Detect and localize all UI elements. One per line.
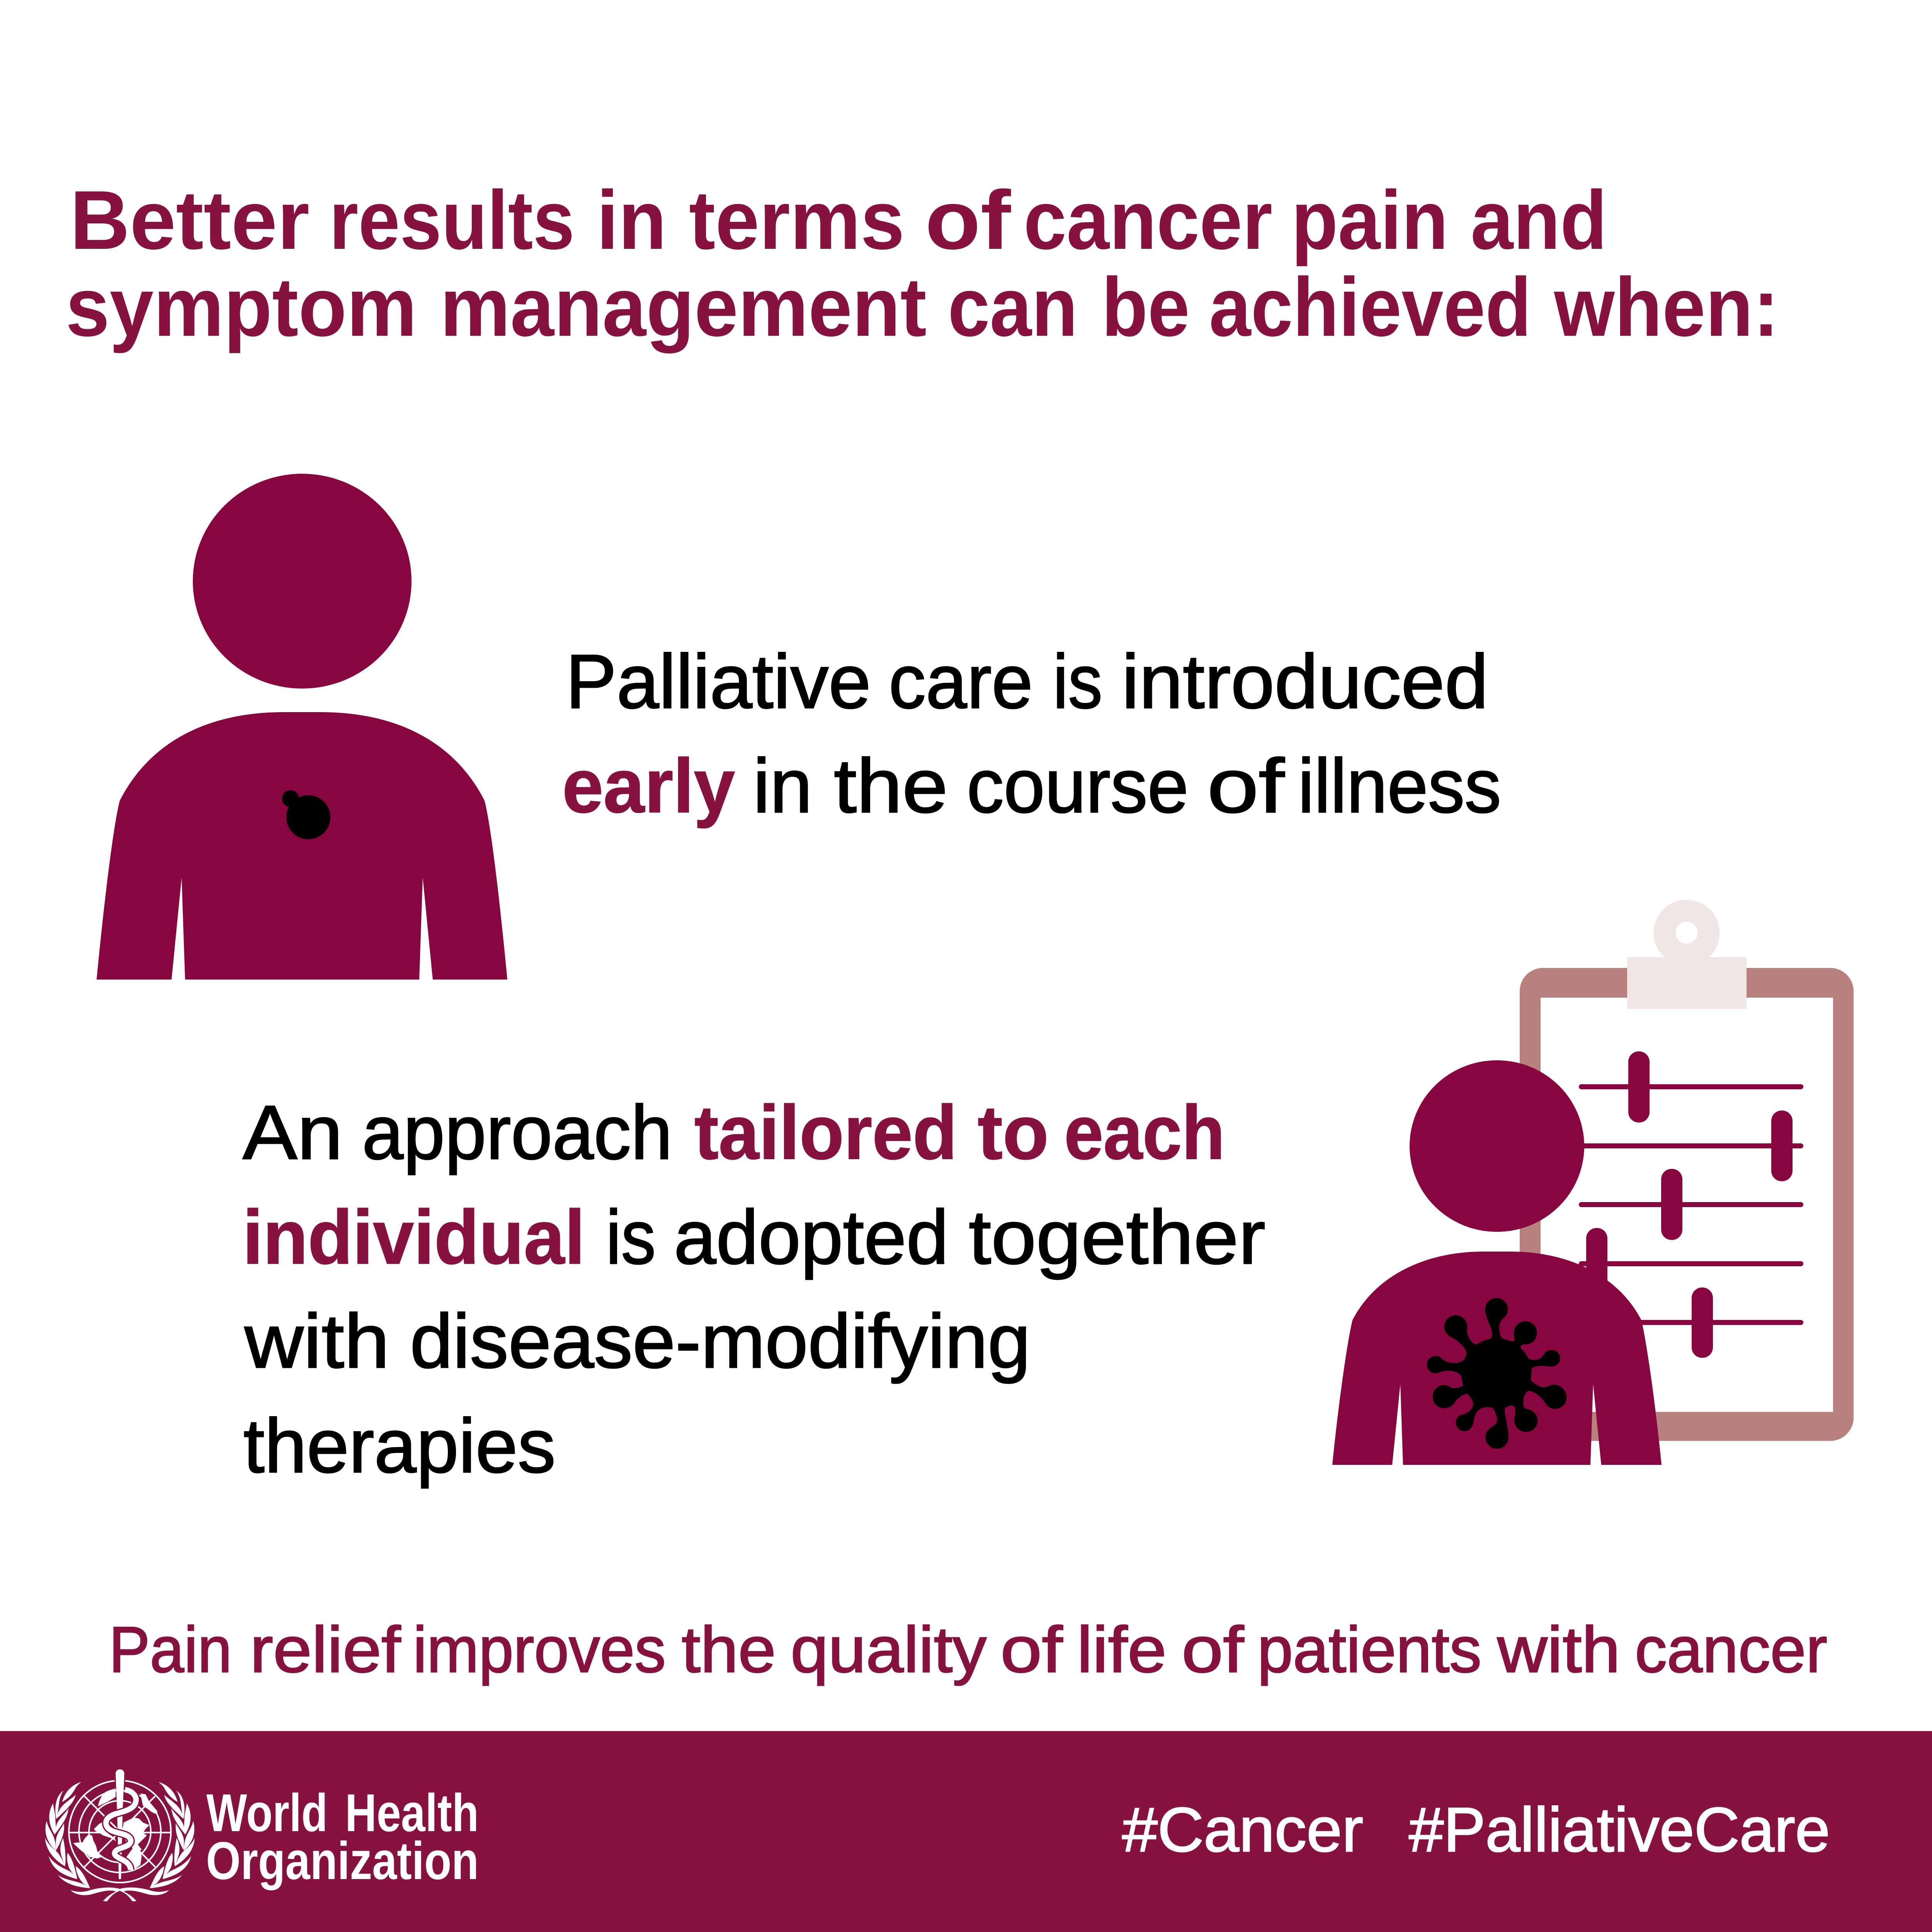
text: pain relief statement: patients (1257, 1613, 1481, 1686)
text: palliative care introduced early (562, 639, 1501, 828)
text: pain relief statement: Pain (109, 1613, 232, 1686)
text: pain relief statement: with (1497, 1613, 1620, 1686)
icon: person with small tumour (97, 474, 507, 980)
text: pain relief statement: of (1000, 1613, 1063, 1686)
text: tailored approach: An (243, 1090, 343, 1175)
title: achieved (1209, 260, 1531, 354)
title: management (440, 260, 927, 354)
title: be (1102, 260, 1190, 354)
text: tailored approach: together (969, 1194, 1265, 1280)
text: World Health Organization wordmark: Health (345, 1783, 479, 1843)
text: pain relief statement: improves (413, 1613, 666, 1686)
text: pain relief statement: of (1182, 1613, 1244, 1686)
text: tailored approach: disease-modifying (410, 1298, 1031, 1384)
text: pain relief statement (109, 1613, 1827, 1686)
text: World Health Organization wordmark: Organization (206, 1831, 479, 1891)
text: palliative care introduced early: care (889, 639, 1033, 724)
text: tailored approach: adopted (674, 1194, 949, 1280)
icon: WHO emblem (45, 1769, 195, 1901)
text: tailored approach: therapies (243, 1403, 556, 1488)
text: tailored approach: is (606, 1194, 656, 1280)
text: palliative care introduced early: course (967, 743, 1189, 828)
title: terms (689, 173, 905, 267)
text: palliative care introduced early: is (1053, 639, 1102, 724)
title: symptom (66, 260, 417, 354)
text: palliative care introduced early: introduced (1122, 639, 1488, 724)
text: palliative care introduced early: the (834, 743, 948, 828)
title: can (948, 260, 1078, 354)
footer band (0, 1731, 1932, 1932)
text: palliative care introduced early: Palliative (566, 639, 871, 724)
title: of (925, 173, 1011, 267)
text: hashtags: #PalliativeCare (1409, 1795, 1830, 1865)
text: tailored approach: each (1064, 1090, 1225, 1175)
text: tailored approach: to (978, 1090, 1049, 1175)
text: tailored approach: with (244, 1298, 389, 1384)
text: palliative care introduced early: illness (1298, 743, 1501, 828)
text: pain relief statement: life (1077, 1613, 1167, 1686)
text: hashtags: #Cancer (1122, 1795, 1363, 1865)
title: and (1471, 173, 1607, 267)
text: pain relief statement: cancer (1635, 1613, 1827, 1686)
text: hashtags (1122, 1795, 1830, 1865)
title: results (329, 173, 575, 267)
text: pain relief statement: the (682, 1613, 776, 1686)
text: palliative care introduced early: in (753, 743, 812, 828)
text: pain relief statement: relief (250, 1613, 401, 1686)
text: palliative care introduced early: of (1207, 743, 1285, 828)
icon: person with large tumour (1332, 1060, 1662, 1465)
title: Better (70, 173, 310, 267)
title: in (597, 173, 667, 267)
text: World Health Organization wordmark (206, 1783, 479, 1891)
text: palliative care introduced early: early (562, 743, 735, 828)
text: World Health Organization wordmark: World (206, 1783, 328, 1843)
icon: clipboard with sliders (1520, 911, 1854, 1441)
title: pain (1291, 173, 1448, 267)
text: tailored approach (243, 1090, 1265, 1488)
text: pain relief statement: quality (791, 1613, 986, 1686)
text: tailored approach: individual (243, 1194, 585, 1280)
text: tailored approach: approach (362, 1090, 672, 1175)
title (66, 173, 1779, 354)
text: tailored approach: tailored (694, 1090, 957, 1175)
title: cancer (1024, 173, 1272, 267)
title: when: (1554, 260, 1779, 354)
